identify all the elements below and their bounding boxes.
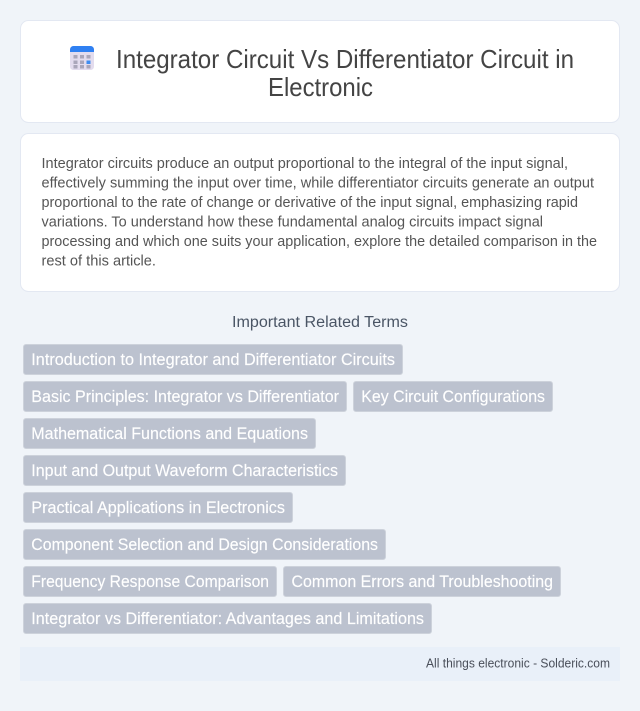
title — [116, 44, 574, 102]
tag: advantages and limitations — [24, 604, 432, 634]
tag: introduction — [24, 344, 402, 374]
tag: component selection: Component Selection and Design Considerations — [31, 535, 378, 554]
footer: All things electronic - Solderic.com — [426, 656, 610, 670]
tag: practical applications — [24, 492, 292, 522]
title: Electronic — [268, 72, 373, 102]
text block: description: Integrator circuits produce an output proportional to the integral of the input signal, — [42, 155, 568, 172]
text block: description: proportional to the rate of change or derivative of the input signal, emphasizing rapid — [42, 194, 578, 211]
footer — [20, 647, 620, 681]
tag: frequency response — [24, 566, 276, 596]
text block: description: rest of this article. — [42, 252, 156, 270]
tag: waveform characteristics — [24, 456, 346, 486]
title: Integrator Circuit Vs Differentiator Circuit in — [116, 44, 574, 74]
tag: key circuit configurations: Key Circuit Configurations — [361, 387, 545, 406]
panel: description — [20, 134, 620, 292]
tag: key circuit configurations — [354, 382, 552, 412]
heading: important related terms: Important Related Terms — [232, 314, 408, 331]
tag: waveform characteristics: Input and Output Waveform Characteristics — [31, 461, 338, 480]
text block: description: variations. To understand how these fundamental analog circuits impact signal — [42, 214, 543, 230]
icon: calendar grid — [70, 46, 94, 70]
panel: title card — [20, 20, 620, 122]
text block: description: effectively summing the input over time, while differentiator circuits generate an output — [42, 174, 595, 192]
tag: component selection — [24, 530, 386, 560]
tag: advantages and limitations: Integrator vs Differentiator: Advantages and Limitations — [31, 609, 424, 628]
panel: related terms tags — [24, 344, 560, 634]
tag: mathematical functions: Mathematical Functions and Equations — [31, 424, 308, 443]
tag: common errors — [284, 566, 560, 596]
text block: description — [42, 155, 597, 270]
tag: mathematical functions — [24, 418, 316, 448]
tag: common errors: Common Errors and Troubleshooting — [292, 572, 553, 591]
tag: basic principles — [24, 382, 346, 412]
text block: description: processing and which one suits your application, explore the detailed comparison in the — [42, 233, 597, 250]
tag: introduction: Introduction to Integrator and Differentiator Circuits — [31, 350, 395, 369]
tag: frequency response: Frequency Response Comparison — [31, 572, 269, 591]
tag: practical applications: Practical Applications in Electronics — [31, 498, 285, 517]
tag: basic principles: Basic Principles: Integrator vs Differentiator — [31, 387, 339, 406]
